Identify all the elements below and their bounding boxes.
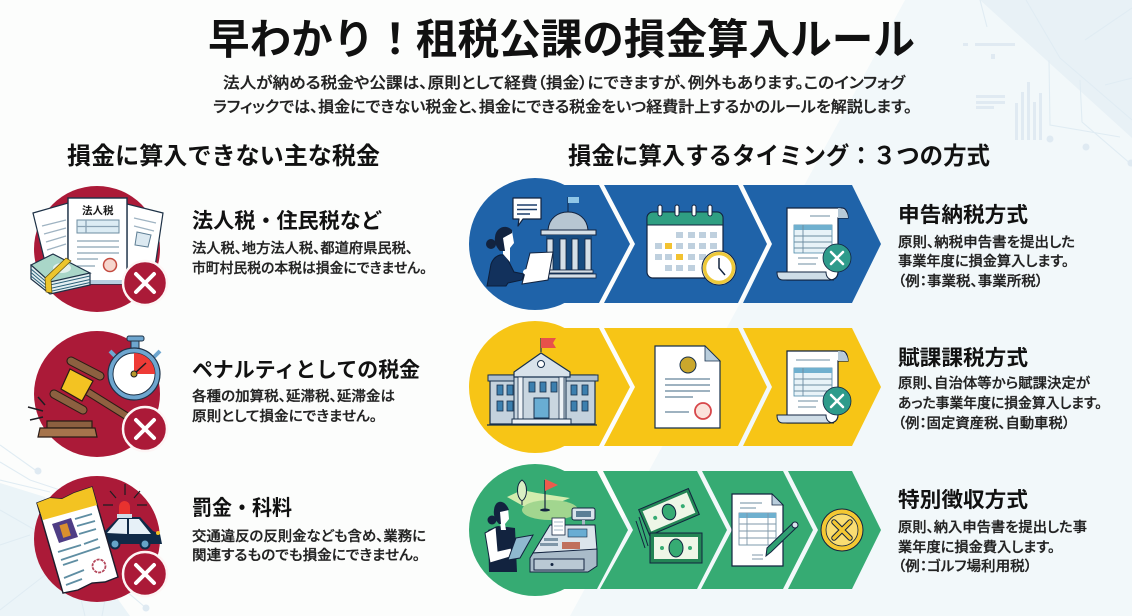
- method text: （例：事業税、事業所税）: [898, 273, 1043, 289]
- icon: traffic ticket and police car: [34, 476, 167, 602]
- heading: non-deductible taxes: 損金に算入できない主な税金: [67, 143, 380, 170]
- item text: 各種の加算税、延滞税、延滞金は: [192, 388, 395, 404]
- item text: 市町村民税の本税は損金にできません。: [192, 260, 427, 276]
- icon: yellow cross coin: [821, 509, 863, 551]
- method text: あった事業年度に損金算入します。: [898, 395, 1102, 411]
- icon: notice scroll with check badge: [777, 351, 851, 423]
- panel: official assessment method: [469, 321, 1102, 453]
- item text: [192, 388, 395, 424]
- method text: [898, 375, 1102, 431]
- icon: form and pen: [732, 494, 798, 566]
- method text: [898, 234, 1075, 289]
- icon: gavel and stopwatch: [28, 331, 167, 457]
- method text: [898, 519, 1087, 574]
- panel: special collection method: [469, 464, 1087, 596]
- panel: penalty taxes: [28, 331, 420, 457]
- item text: 交通違反の反則金なども含め、業務に: [192, 528, 426, 544]
- icon: tax return scroll with check badge: [777, 208, 851, 280]
- item heading: 法人税・住民税など: [192, 210, 382, 233]
- icon: municipal building: [487, 338, 598, 425]
- chevron flow: yellow: [469, 321, 881, 453]
- method text: 事業年度に損金算入します。: [898, 253, 1069, 269]
- icon: tax documents and cash: [31, 186, 167, 312]
- method text: 原則、納入申告書を提出した事: [898, 519, 1087, 535]
- title: 早わかり！租税公課の損金算入ルール: [208, 16, 915, 63]
- method text: 原則、自治体等から賦課決定が: [898, 375, 1090, 391]
- intro text: ラフィックでは、損金にできない税金と、損金にできる税金をいつ経費計上するかのルールを解説します。: [213, 98, 912, 116]
- intro text: 法人が納める税金や公課は、原則として経費（損金）にできますが、例外もあります。このインフォグ: [223, 73, 906, 92]
- panel: corporate and resident taxes: [31, 186, 427, 312]
- heading: timing methods: 損金に算入するタイミング：３つの方式: [568, 142, 990, 170]
- icon: official notice document: [655, 346, 720, 428]
- method heading: 特別徴収方式: [898, 489, 1028, 512]
- chevron flow: blue: [469, 178, 881, 310]
- icon: calendar with clock: [647, 205, 736, 285]
- method text: 原則、納税申告書を提出した: [898, 234, 1075, 250]
- method text: 業年度に損金費入します。: [898, 539, 1055, 555]
- item text: 原則として損金にできません。: [192, 408, 377, 424]
- method heading: 賦課課税方式: [898, 347, 1028, 370]
- icon: person and government building: [486, 197, 596, 286]
- icon: tax documents and cash: 法人税: [82, 204, 114, 217]
- item text: [192, 240, 427, 276]
- item text: 法人税、地方法人税、都道府県民税、: [192, 240, 413, 256]
- panel: fines: [34, 476, 426, 602]
- panel: self-assessment method: [469, 178, 1075, 310]
- item text: 関連するものでも損金にできません。: [192, 547, 420, 563]
- item text: [192, 528, 426, 563]
- method text: （例：固定資産税、自動車税）: [898, 415, 1070, 431]
- item heading: 罰金・科料: [192, 497, 292, 520]
- chevron flow: green: [469, 464, 881, 596]
- icon: banknotes: [636, 489, 702, 563]
- item heading: ペナルティとしての税金: [192, 359, 420, 382]
- intro text: [213, 73, 912, 116]
- method text: （例：ゴルフ場利用税）: [898, 558, 1032, 574]
- icon: golf course, attendant and cash register: [485, 479, 597, 572]
- method heading: 申告納税方式: [898, 204, 1028, 227]
